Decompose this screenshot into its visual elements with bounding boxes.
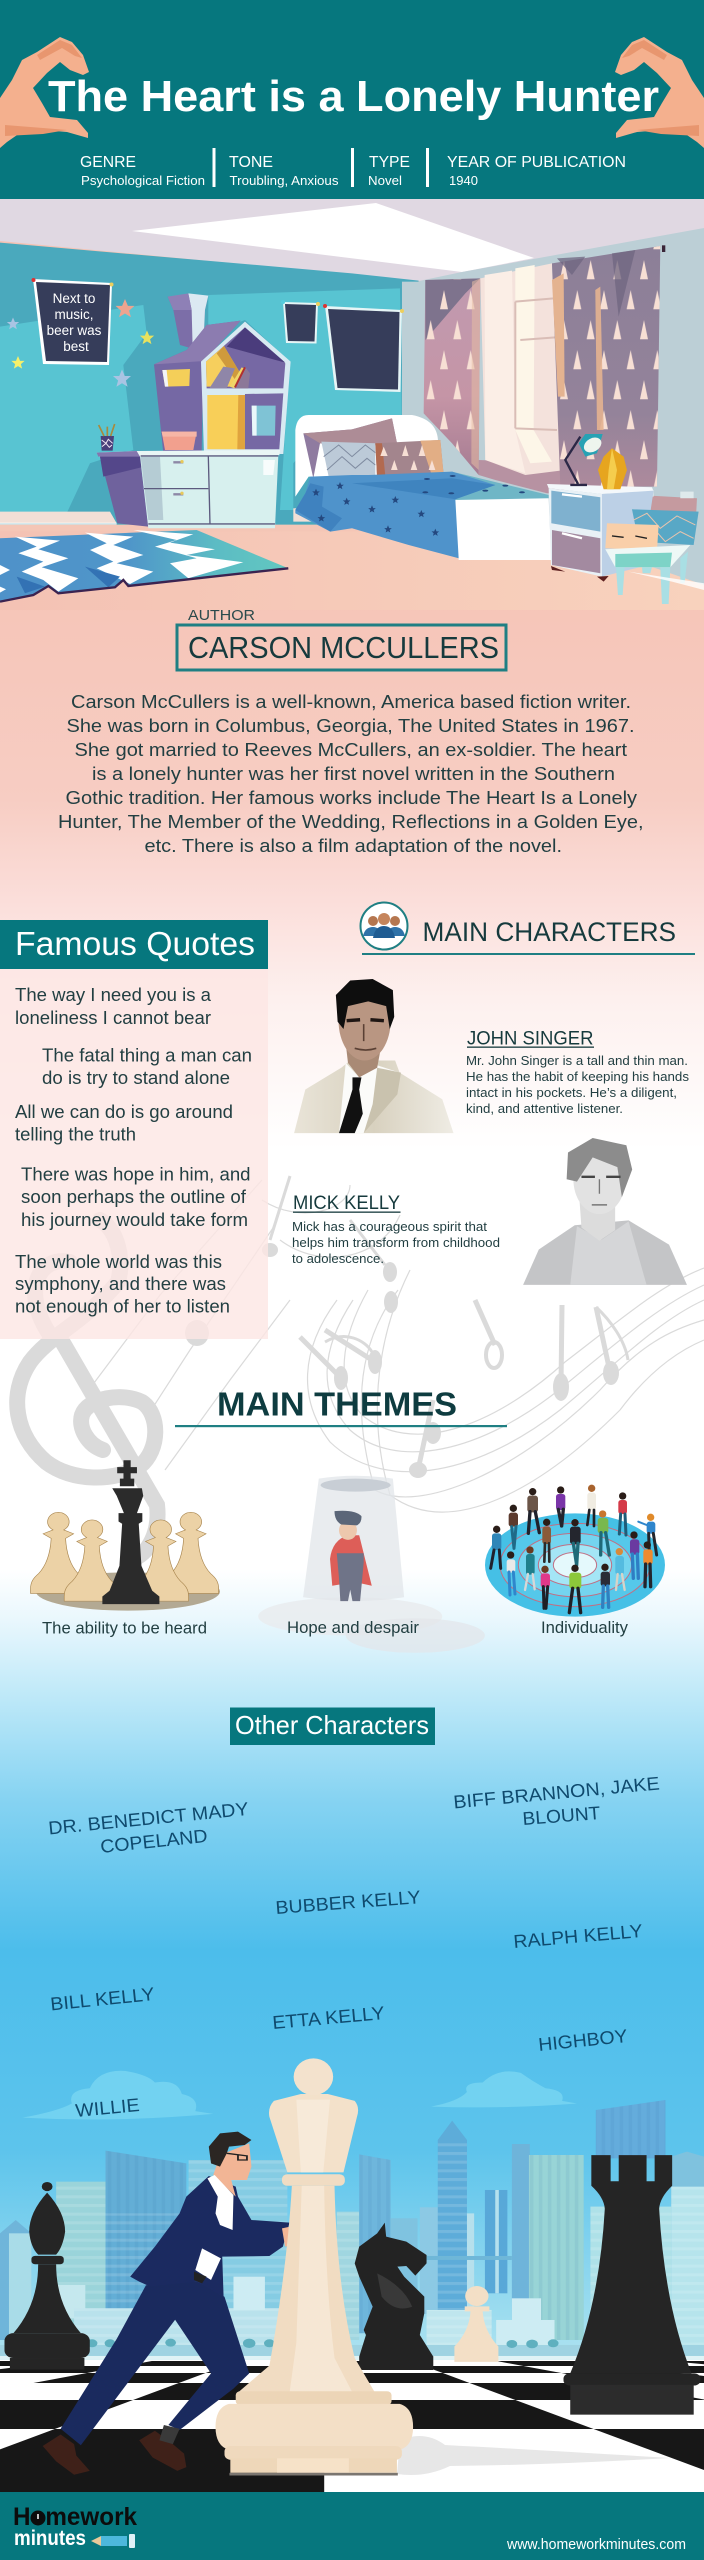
icon: chess pieces: [31, 1460, 220, 1611]
author section: [58, 607, 644, 856]
businessman: [43, 2132, 319, 2475]
chess theme label: The ability to be heard: [42, 1618, 207, 1638]
book facts row: Troubling, Anxious: [230, 173, 339, 188]
Mick Kelly description: [292, 1220, 500, 1266]
John Singer description: Mr. John Singer is a tall and thin man.: [466, 1054, 688, 1068]
author biography: She got married to Reeves McCullers, an ex-soldier. The heart: [74, 739, 627, 760]
book facts row: Novel: [368, 173, 402, 188]
quote text: loneliness I cannot bear: [15, 1007, 211, 1028]
quote text: do is try to stand alone: [42, 1067, 230, 1088]
character names: HIGHBOY: [537, 2025, 628, 2055]
wall frames: [281, 300, 404, 392]
author name box: CARSON MCCULLERS: [188, 630, 499, 665]
city skyline: [0, 2100, 704, 2360]
author biography: Gothic tradition. Her famous works include The Heart Is a Lonely: [66, 787, 638, 808]
character names: BIFF BRANNON, JAKE: [452, 1772, 660, 1812]
logo: [13, 2503, 137, 2550]
quote text: There was hope in him, and: [21, 1164, 250, 1184]
character names: BLOUNT: [522, 1802, 601, 1829]
title: The Heart is a Lonely Hunter: [48, 72, 659, 121]
quote text: All we can do is go around: [15, 1101, 233, 1122]
chessboard: [0, 2360, 704, 2492]
black bishop: [4, 2182, 90, 2369]
portrait: Mick Kelly: [523, 1138, 687, 1285]
individuality theme label: Individuality: [541, 1618, 628, 1637]
despair theme label: Hope and despair: [287, 1618, 419, 1637]
Mick Kelly heading: MICK KELLY: [293, 1193, 400, 1214]
book facts row: TYPE: [369, 154, 410, 171]
icon: group of people: [360, 902, 408, 950]
music notes watermark: [17, 1176, 704, 1560]
author biography: etc. There is also a film adaptation of the novel.: [144, 835, 562, 856]
author biography: is a lonely hunter was her first novel written in the Southern: [92, 763, 615, 784]
quote text: The fatal thing a man can: [42, 1044, 252, 1066]
quote text: [15, 984, 252, 1316]
quotes heading: [0, 920, 268, 969]
Mick Kelly description: to adolescence.: [292, 1252, 384, 1266]
themes heading: MAIN THEMES: [217, 1386, 457, 1422]
character names: RALPH KELLY: [513, 1920, 643, 1952]
poster: next to music: best: [63, 339, 89, 354]
author biography: She was born in Columbus, Georgia, The United States in 1967.: [66, 715, 634, 736]
panel: main themes: [31, 1386, 665, 1653]
quote text: The way I need you is a: [15, 984, 212, 1005]
poster: next to music: music,: [54, 307, 94, 322]
character names: COPELAND: [99, 1825, 208, 1857]
clouds: [22, 2071, 577, 2119]
portrait: John Singer: [294, 979, 453, 1133]
white king chess piece: [216, 2058, 413, 2475]
author label: AUTHOR: [188, 607, 255, 624]
poster: next to music: Next to: [53, 291, 95, 306]
book facts row: [80, 148, 626, 188]
John Singer description: [466, 1054, 689, 1116]
icon: person in glass jar: [258, 1476, 485, 1653]
Mick Kelly description: helps him transform from childhood: [292, 1236, 500, 1250]
poster: next to music: [32, 278, 114, 365]
bed: [295, 415, 551, 560]
character names: WILLIE: [74, 2094, 140, 2121]
quote text: The whole world was this: [15, 1251, 222, 1272]
white pawn: [454, 2286, 498, 2362]
poster: next to music: beer was: [47, 323, 102, 338]
footer band: [0, 2492, 704, 2560]
John Singer description: intact in his pockets. He’s a diligent,: [466, 1086, 677, 1100]
other characters heading: Other Characters: [235, 1710, 429, 1740]
website url: www.homeworkminutes.com: [506, 2537, 686, 2553]
book facts row: YEAR OF PUBLICATION: [447, 154, 626, 171]
quote text: soon perhaps the outline of: [21, 1186, 247, 1207]
icon: right hand: [615, 37, 704, 148]
icon: treble clef: [17, 1220, 158, 1560]
quote text: telling the truth: [15, 1124, 136, 1144]
John Singer description: kind, and attentive listener.: [466, 1102, 623, 1116]
book facts row: Psychological Fiction: [81, 173, 205, 188]
Mick Kelly description: Mick has a courageous spirit that: [292, 1220, 488, 1234]
zigzag rug: [0, 530, 288, 602]
notes: [270, 1176, 628, 1470]
dresser: [97, 450, 280, 528]
John Singer description: He has the habit of keeping his hands: [466, 1070, 689, 1084]
author biography: [58, 691, 644, 856]
main characters heading: MAIN CHARACTERS: [422, 917, 676, 947]
logo: minutes: [14, 2527, 86, 2550]
quote text: not enough of her to listen: [15, 1296, 230, 1316]
bedroom illustration: [0, 199, 704, 610]
panel: famous quotes: [0, 920, 268, 1339]
icon: crowd on circular target: [485, 1485, 665, 1617]
icon: left hand: [0, 37, 89, 148]
book facts row: GENRE: [80, 154, 136, 171]
quote text: symphony, and there was: [15, 1273, 226, 1294]
cityscape and chessboard scene: [0, 2058, 704, 2492]
shadow of king: [397, 2436, 670, 2475]
author biography: Hunter, The Member of the Wedding, Reflections in a Golden Eye,: [58, 811, 644, 832]
black rook: [563, 2155, 700, 2415]
logo: Homework: [13, 2503, 137, 2531]
stars on wall: [7, 299, 154, 387]
book facts row: TONE: [229, 154, 273, 171]
John Singer heading: JOHN SINGER: [467, 1028, 594, 1050]
staff lines: [85, 1180, 704, 1512]
character names: BILL KELLY: [49, 1983, 155, 2014]
book facts row: 1940: [449, 173, 478, 188]
black knight: [355, 2223, 433, 2370]
author biography: Carson McCullers is a well-known, America based fiction writer.: [71, 691, 631, 712]
character names: ETTA KELLY: [271, 2002, 385, 2033]
character names: DR. BENEDICT MADY: [47, 1798, 249, 1838]
dollhouse shelf: [99, 293, 291, 454]
quotes heading: Famous Quotes: [15, 925, 255, 962]
panel: main characters: [292, 902, 695, 1285]
left curtain, sheer and right curtain: [424, 245, 665, 493]
other characters section: [47, 1708, 660, 2121]
character names: [47, 1772, 660, 2121]
character names: BUBBER KELLY: [275, 1886, 421, 1918]
quote text: his journey would take form: [21, 1209, 248, 1230]
nightstand, lamp, vase and stool: [547, 434, 704, 604]
header band: [0, 0, 704, 199]
